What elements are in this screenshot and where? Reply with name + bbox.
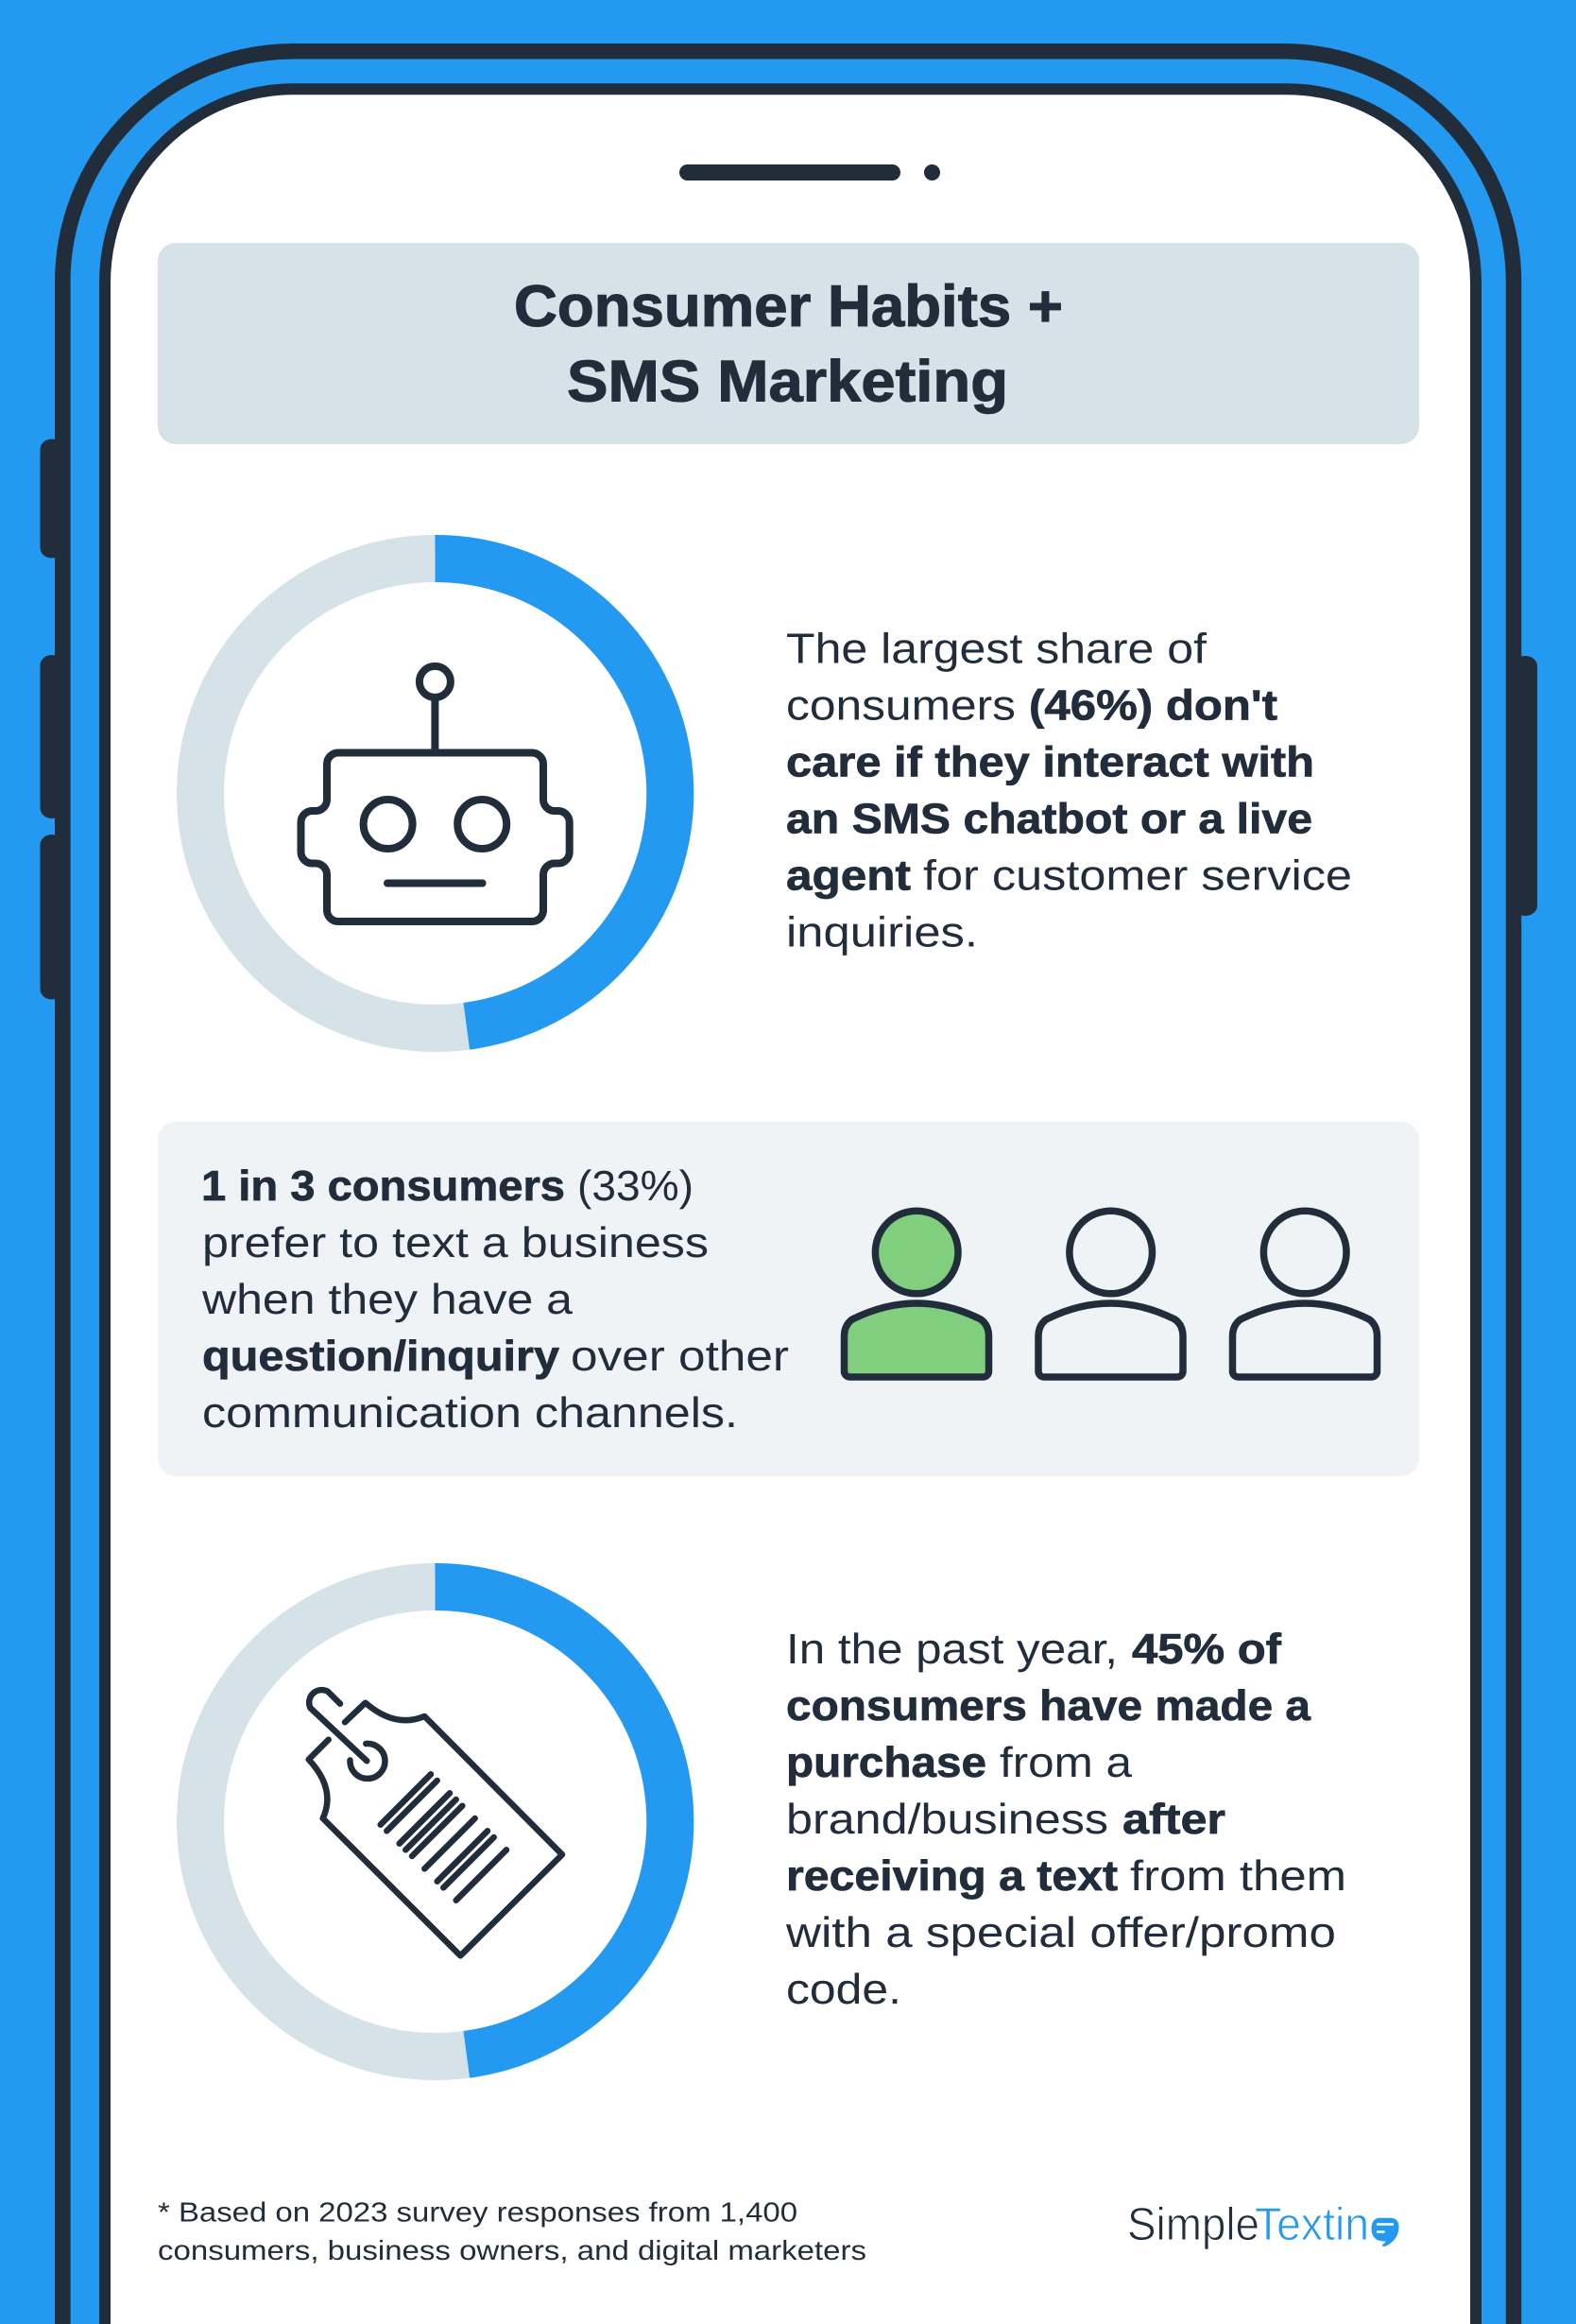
text: purchase statistic: purchase — [786, 1738, 986, 1786]
text: chatbot statistic: care if they interact with — [786, 738, 1314, 786]
text: chatbot statistic: agent — [786, 852, 911, 900]
text: purchase statistic: from them — [1130, 1851, 1346, 1900]
text: chatbot statistic — [786, 625, 1352, 956]
title: Consumer Habits + — [514, 274, 1063, 339]
icon: person outline — [1038, 1211, 1183, 1377]
text: purchase statistic: In the past year, — [786, 1625, 1118, 1673]
title panel — [158, 243, 1419, 444]
text: purchase statistic: after — [1122, 1795, 1225, 1843]
speaker and camera — [679, 164, 940, 181]
footnote: * Based on 2023 survey responses from 1,400 — [158, 2198, 797, 2229]
icon: price tag — [309, 1690, 562, 1955]
text: purchase statistic: receiving a text — [786, 1851, 1118, 1900]
title — [514, 274, 1063, 414]
text: chatbot statistic: consumers — [786, 681, 1016, 730]
footnote: consumers, business owners, and digital marketers — [158, 2236, 866, 2266]
text: purchase statistic: from a — [1000, 1738, 1133, 1786]
text: 1 in 3 statistic: 1 in 3 consumers — [201, 1162, 565, 1210]
text: purchase statistic: 45% of — [1132, 1625, 1282, 1673]
text: chatbot statistic: an SMS chatbot or a live — [786, 795, 1312, 843]
logo: SimpleTexting — [1127, 2199, 1398, 2250]
panel: 1 in 3 consumers — [158, 1122, 1419, 1476]
text: purchase statistic: code. — [786, 1965, 901, 2013]
text: chatbot statistic: inquiries. — [786, 908, 978, 956]
text: purchase statistic — [785, 1625, 1346, 2013]
icon: robot — [300, 666, 570, 921]
icon: person outline — [1232, 1211, 1378, 1377]
text: 1 in 3 statistic: question/inquiry — [202, 1332, 559, 1380]
text: purchase statistic: brand/business — [786, 1795, 1108, 1843]
text: chatbot statistic: The largest share of — [786, 625, 1208, 673]
side buttons — [40, 439, 1537, 1000]
text: chatbot statistic: (46%) don't — [1029, 681, 1277, 730]
text: 1 in 3 statistic — [201, 1162, 789, 1437]
text: 1 in 3 statistic: prefer to text a business — [202, 1218, 709, 1266]
text: purchase statistic: with a special offer/promo — [785, 1908, 1336, 1956]
title: SMS Marketing — [567, 350, 1008, 414]
logo: SimpleTexting: Simple — [1127, 2199, 1259, 2250]
icon: speech bubble — [1372, 2218, 1398, 2247]
logo: SimpleTexting: Textin — [1255, 2199, 1369, 2250]
donut chart: 46% with robot icon — [200, 559, 670, 1028]
text: 1 in 3 statistic: communication channels. — [202, 1388, 738, 1437]
footnote — [158, 2198, 866, 2266]
text: 1 in 3 statistic: when they have a — [201, 1275, 574, 1323]
text: 1 in 3 statistic: over other — [571, 1332, 789, 1380]
donut chart: 45% with price tag icon — [200, 1587, 670, 2057]
icon: person filled — [845, 1211, 988, 1377]
text: chatbot statistic: for customer service — [923, 852, 1352, 900]
text: 1 in 3 statistic: (33%) — [577, 1162, 694, 1210]
text: purchase statistic: consumers have made a — [786, 1681, 1311, 1730]
